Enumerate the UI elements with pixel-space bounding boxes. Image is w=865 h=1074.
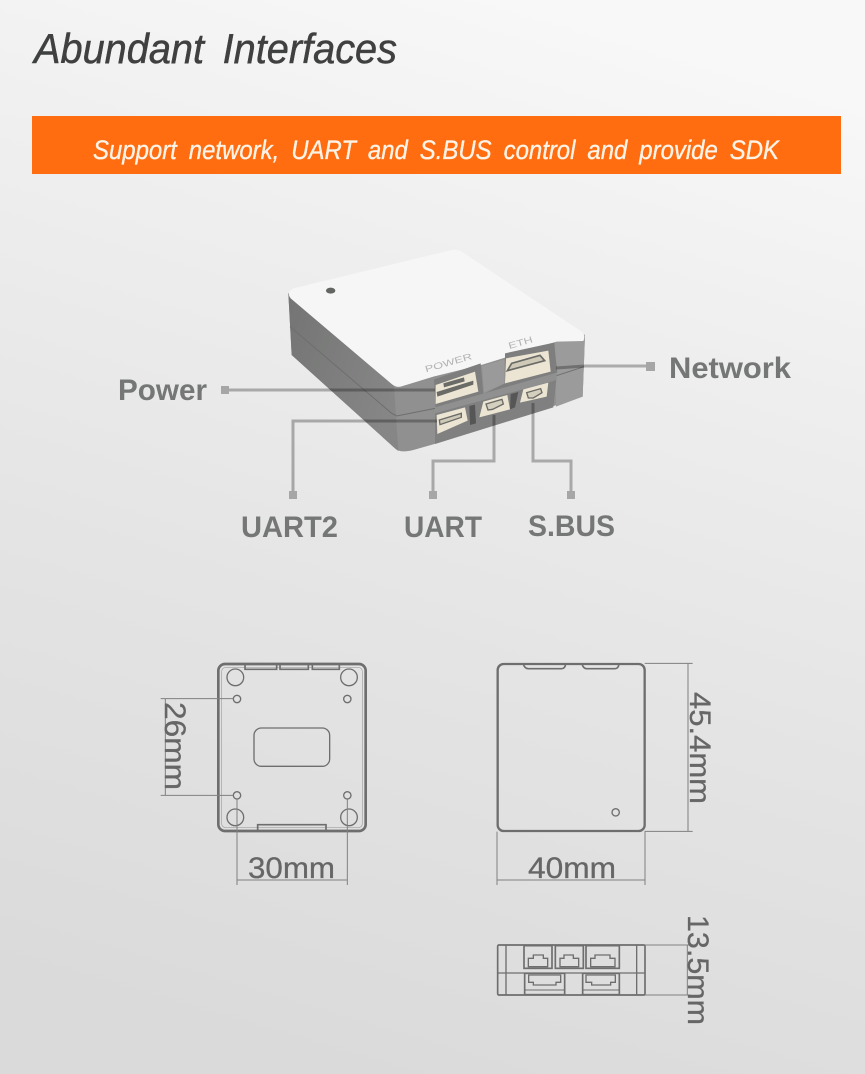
label: UART: UART: [404, 511, 482, 544]
dimension lines: [497, 663, 693, 885]
orange banner: Support network, UART and S.BUS control and provide SDK: [93, 135, 780, 165]
side view drawing: [498, 945, 691, 995]
device illustration: [288, 250, 585, 451]
label: S.BUS: S.BUS: [528, 510, 615, 543]
seam line: [290, 327, 584, 416]
dimension: 40mm: 40mm: [528, 852, 616, 885]
power leader: [225, 388, 435, 392]
eth port: [505, 351, 551, 383]
recess lower row: [435, 377, 557, 444]
label: UART2: UART2: [241, 511, 338, 544]
indicator: [612, 809, 619, 816]
sbus port: [520, 383, 548, 403]
dimension lines: [161, 699, 347, 885]
uart2 port: [437, 407, 468, 434]
top face: [289, 250, 584, 387]
top view drawing: [497, 663, 693, 885]
power port: [436, 372, 478, 404]
uart port: [479, 395, 510, 417]
top tabs: [523, 664, 619, 669]
leader endpoints: [221, 362, 655, 499]
uart2 leader: [293, 421, 437, 495]
orange banner: [32, 116, 841, 174]
mounting holes: [227, 669, 357, 826]
label: Network: Network: [669, 352, 791, 385]
divider band: [435, 373, 557, 413]
indicator hole: [326, 288, 335, 294]
outline: [218, 664, 366, 831]
POWER label: POWER: [424, 351, 474, 374]
midline and end marks: [498, 945, 645, 995]
uart leader: [433, 415, 494, 495]
bottom view drawing: [161, 664, 366, 885]
device side walls: [288, 250, 585, 451]
outline: [498, 945, 645, 995]
centre pillar: [482, 359, 504, 393]
title: Abundant Interfaces: [31, 25, 397, 72]
front right wall: [555, 335, 585, 407]
label: Power: Power: [118, 374, 207, 407]
dimension: 45.4mm: 45.4mm: [683, 692, 716, 804]
leader lines: [225, 366, 650, 495]
upper port row: [524, 946, 619, 968]
left wall: [288, 293, 398, 451]
port labels: [118, 352, 791, 544]
network leader: [556, 366, 650, 368]
dimension: 30mm: 30mm: [248, 852, 335, 885]
dimension: 13.5mm: 13.5mm: [681, 915, 714, 1025]
sbus leader: [533, 403, 571, 495]
bottom tab: [258, 825, 326, 831]
ETH label: ETH: [507, 334, 534, 351]
outline: [498, 664, 645, 831]
port cluster: [434, 343, 557, 444]
central window: [254, 728, 330, 766]
lower port row: [525, 973, 619, 995]
dimension lines: [645, 945, 691, 995]
recess upper row: [434, 343, 557, 409]
top tabs: [245, 664, 339, 669]
dimension: 26mm: 26mm: [158, 702, 191, 790]
lower port pillars: [469, 392, 518, 425]
